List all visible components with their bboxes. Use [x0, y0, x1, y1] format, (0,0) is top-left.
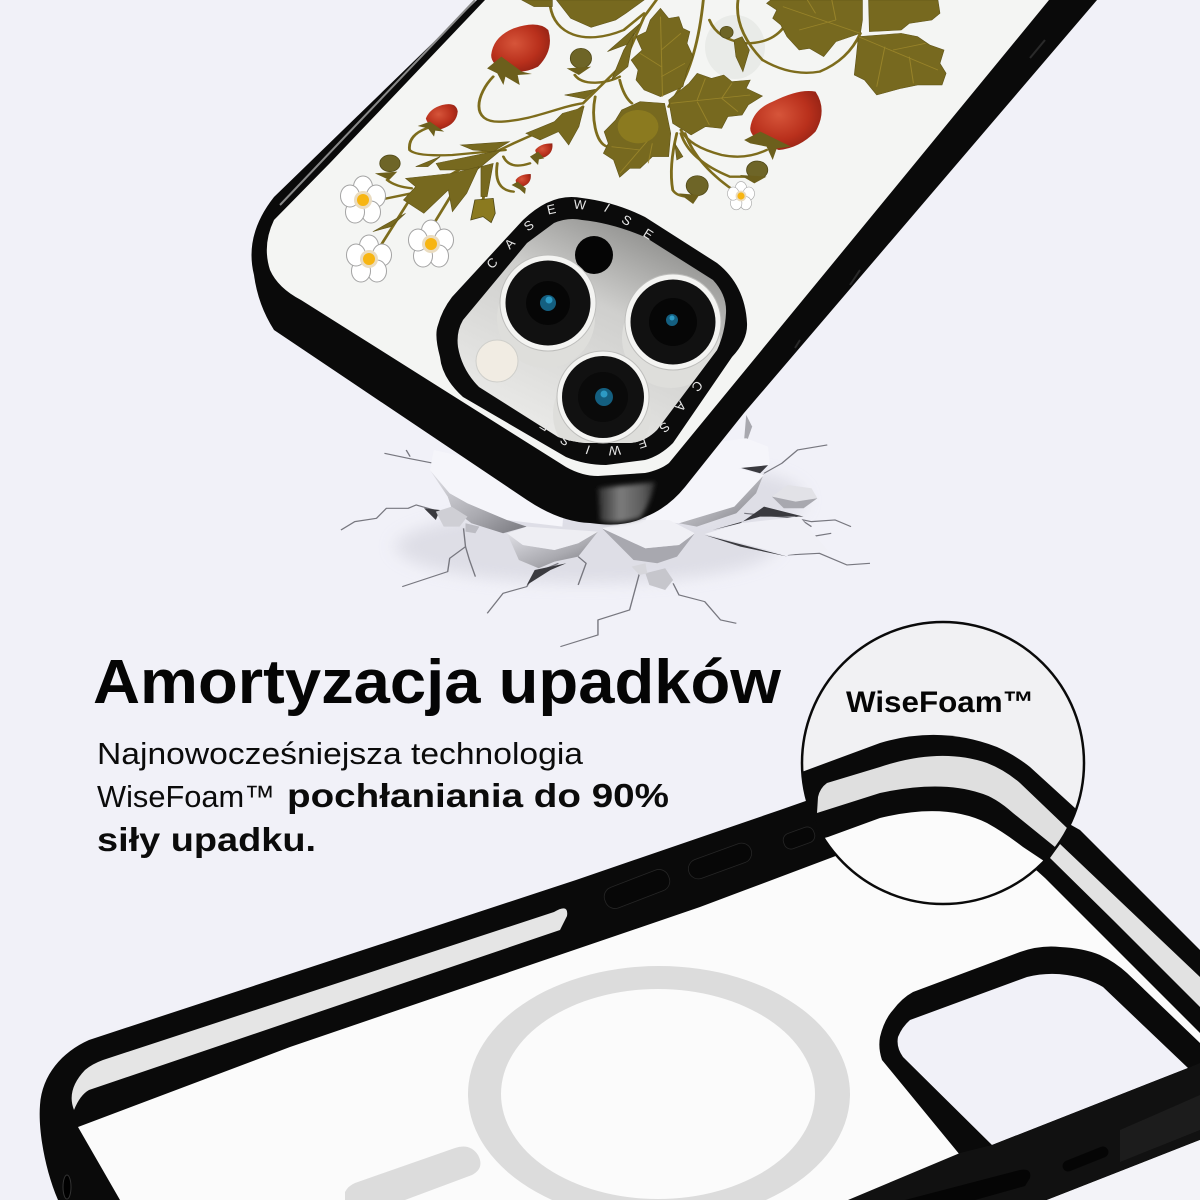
- magnifier label: WiseFoam™: [846, 686, 1034, 719]
- camera bumper ring: [436, 197, 747, 465]
- centre-left chunk: [507, 527, 598, 568]
- camera cutout frame: [879, 947, 1200, 1155]
- dark crack gaps: [424, 463, 804, 585]
- right raised plate: [645, 438, 770, 527]
- white flowers: [340, 176, 754, 282]
- right wedge plate: [705, 517, 827, 555]
- right foam strip: [1050, 844, 1200, 1007]
- lower volume button: [905, 1170, 1030, 1200]
- case brand text upper: CASEWISE: [488, 200, 654, 268]
- magnified white interior: [824, 811, 1044, 903]
- strawberries: [426, 25, 822, 187]
- lens two: [625, 274, 721, 370]
- magsafe ring: [468, 966, 850, 1200]
- description text: [97, 736, 669, 858]
- small rocks: [436, 485, 817, 590]
- camera sensor hole: [575, 236, 613, 274]
- magnifier background: [802, 622, 1084, 904]
- side buttons: [795, 40, 1045, 348]
- centre-right chunk: [602, 520, 695, 563]
- faint magsafe ghost: [705, 15, 765, 79]
- top phone in case: [252, 0, 1097, 526]
- bottom case open view: [40, 767, 1200, 1200]
- unripe berry: [618, 110, 658, 143]
- white case back: [267, 0, 1049, 476]
- side buttons: [601, 825, 817, 911]
- case outer black frame: [40, 767, 1200, 1200]
- fragment behind phone edge: [744, 415, 752, 440]
- lower side band: [848, 1063, 1200, 1200]
- leaves: [373, 0, 946, 232]
- white interior: [78, 834, 1200, 1200]
- lens three: [557, 351, 649, 443]
- magnified case corner: [804, 734, 1076, 902]
- magnifier callout: WiseFoam: [800, 620, 1086, 906]
- area outside case lower right: [1047, 1140, 1200, 1200]
- buds: [380, 26, 768, 223]
- leaf veins: [612, 0, 938, 173]
- camera cutout window: [898, 974, 1188, 1145]
- description line two regular: WiseFoam™: [97, 779, 275, 814]
- case brand text lower: CASEWISE: [539, 382, 702, 456]
- soft impact shadow: [396, 473, 804, 583]
- lower side band sheen: [1120, 1095, 1200, 1162]
- magnifier ring: [802, 622, 1084, 904]
- lens barrels: [554, 316, 720, 443]
- strawberry illustration: [373, 0, 946, 248]
- left raised plate: [430, 450, 566, 533]
- magnified outer frame: [804, 734, 1076, 860]
- left foam strip: [72, 908, 567, 1110]
- crack lines: [341, 445, 870, 647]
- lower switch button: [1068, 1152, 1103, 1166]
- camera window: [458, 219, 726, 443]
- stems: [379, 0, 860, 248]
- description line three bold: siły upadku.: [97, 821, 316, 858]
- cracked ground impact: [341, 415, 870, 647]
- calyxes: [375, 57, 791, 204]
- bumper gloss highlight: [598, 482, 655, 522]
- description line two bold: pochłaniania do 90%: [287, 777, 669, 814]
- magnified foam strip: [817, 756, 1067, 847]
- lens one: [500, 255, 596, 351]
- magsafe alignment pill: [345, 1147, 480, 1200]
- title: Amortyzacja upadków: [93, 648, 782, 717]
- description line one: Najnowocześniejsza technologia: [97, 736, 584, 771]
- rim reflection: [280, 0, 475, 205]
- lower-left hole: [63, 1175, 71, 1199]
- flash: [476, 340, 518, 382]
- case black outer bumper: [252, 0, 1097, 525]
